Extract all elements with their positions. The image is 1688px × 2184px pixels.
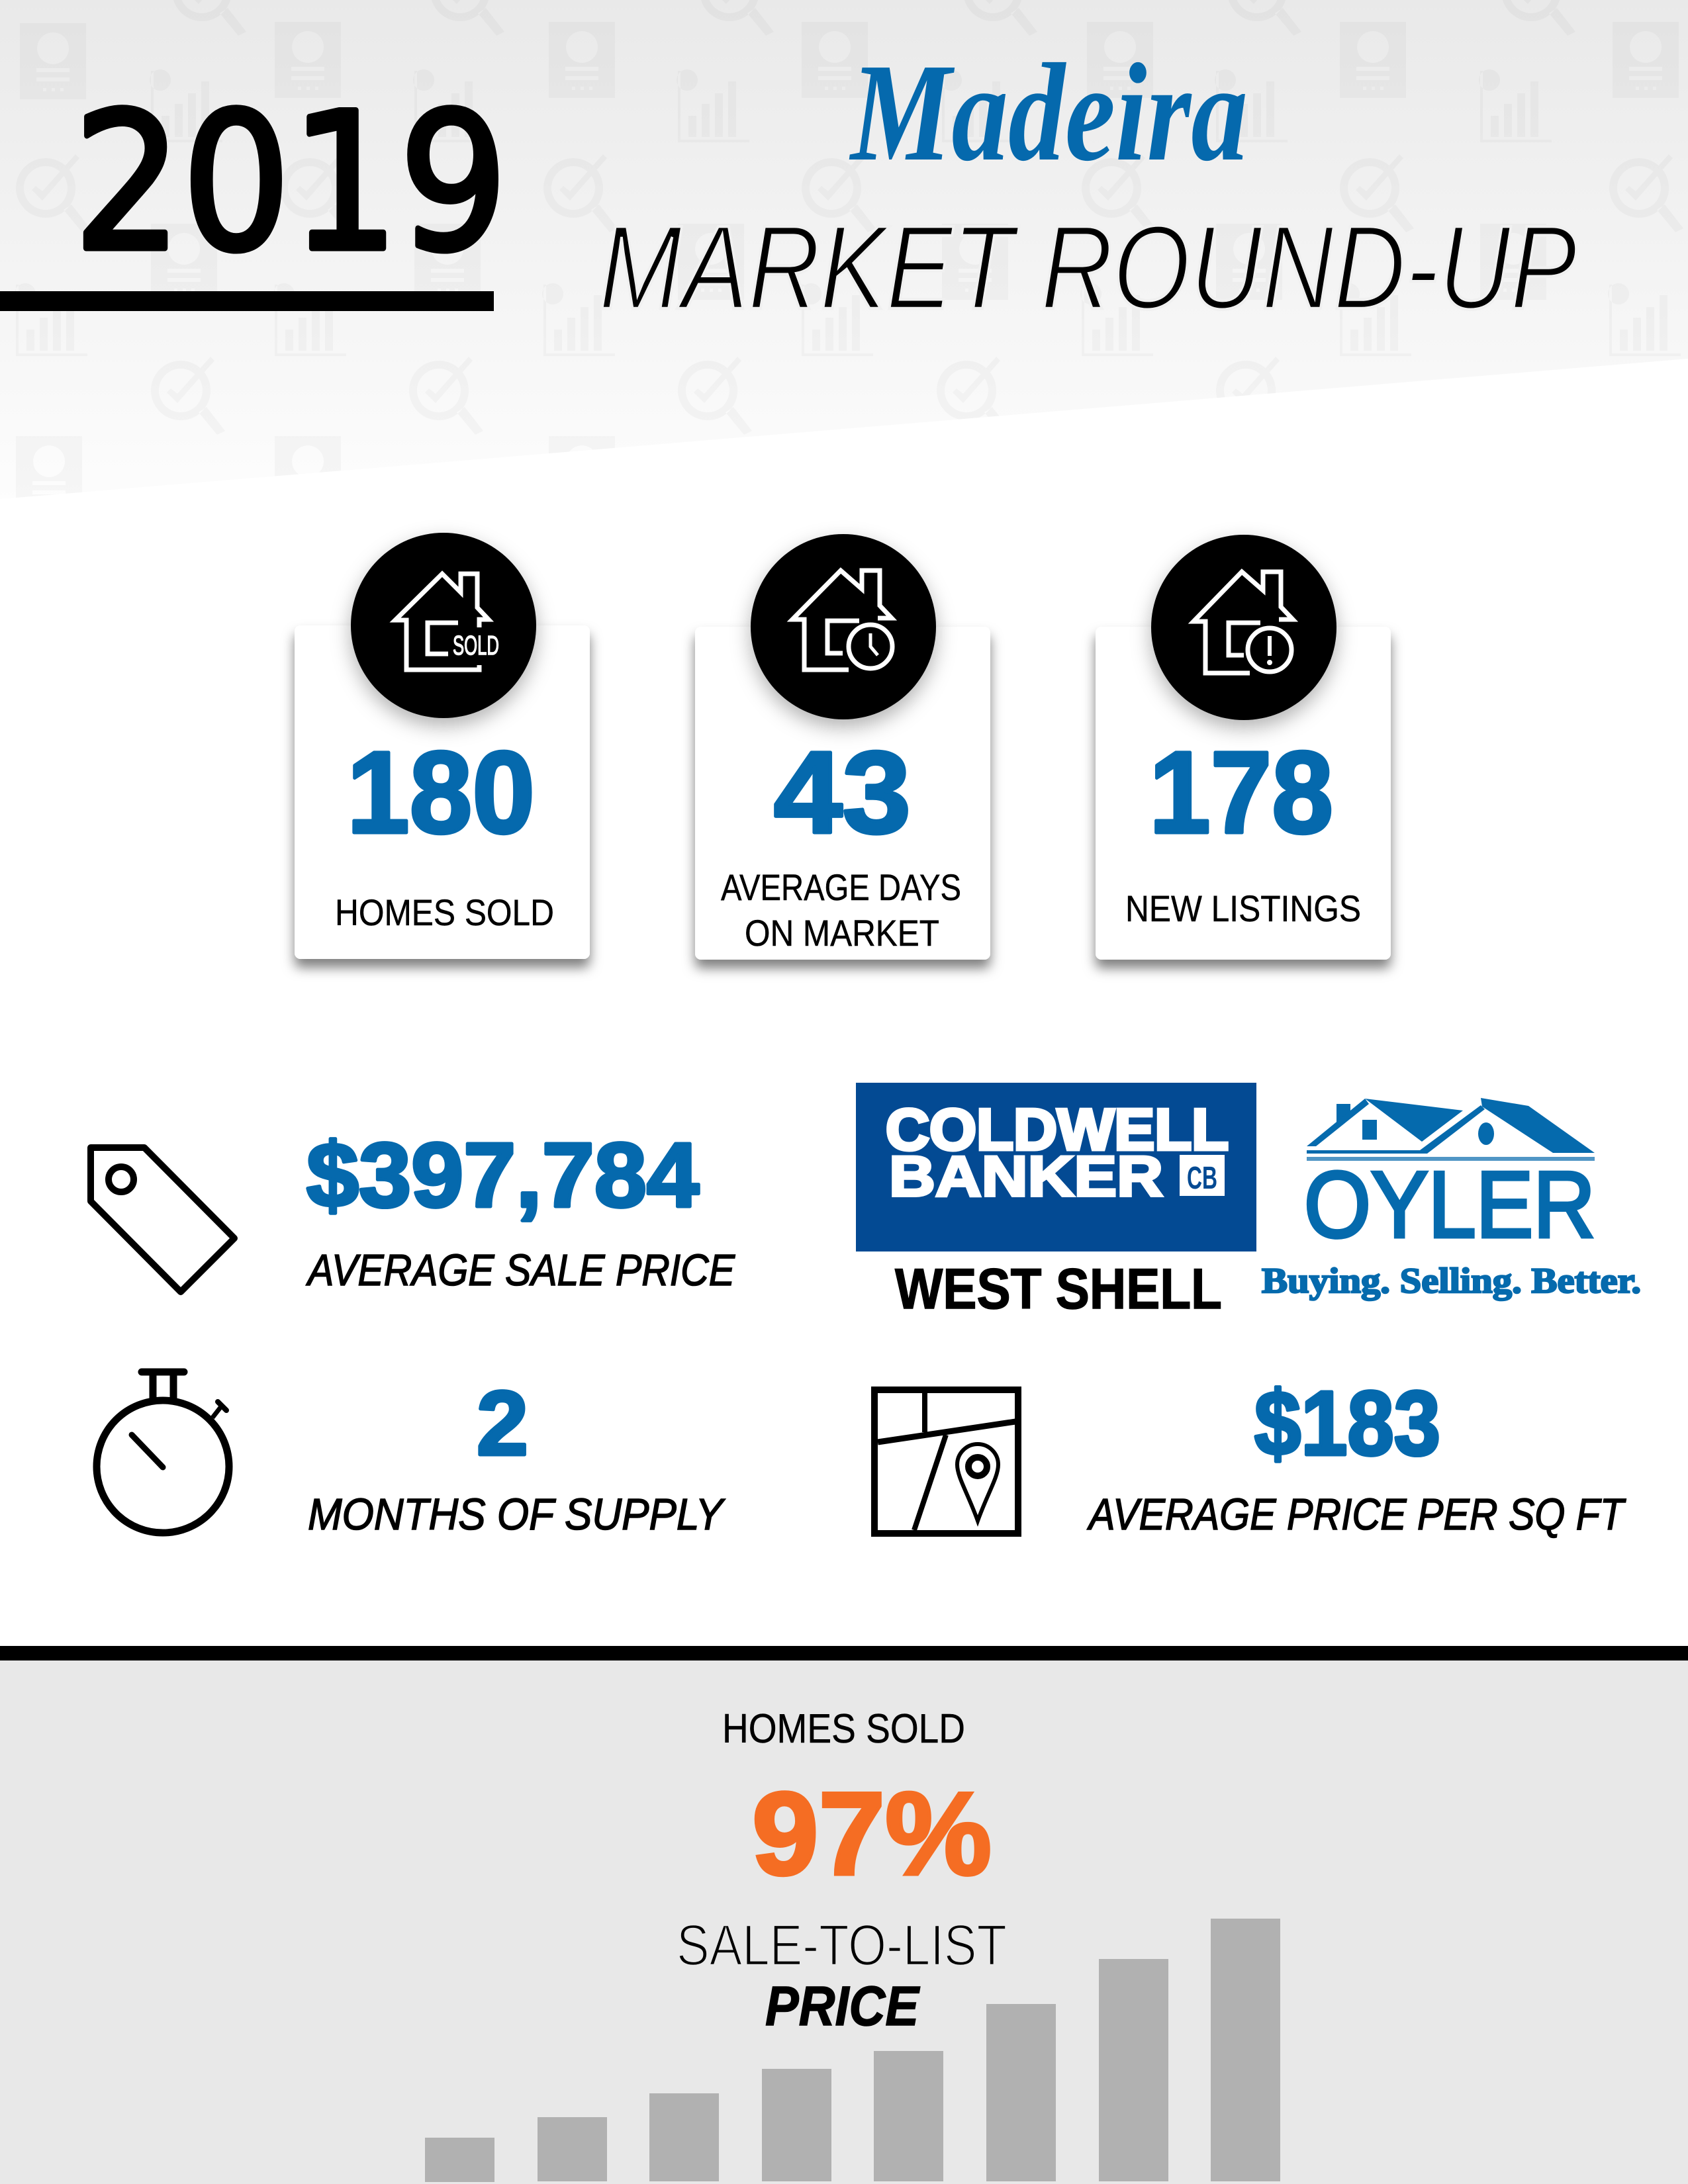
header background panel [0,0,1688,512]
stat number: average price per sq ft: $183 [1254,1373,1440,1475]
stat label: average days on market: ON MARKET [745,912,939,954]
stat label: average days on market: AVERAGE DAYS [721,866,961,908]
year heading: 2019 [73,73,508,293]
icon: house with clock [751,534,936,719]
icon: house with alert [1151,535,1336,720]
logo: Oyler: OYLER [1304,1152,1595,1257]
stat number: 180: 180 [347,728,535,858]
label: sale-to-list: SALE-TO-LIST [677,1913,1007,1978]
year underline [0,291,494,311]
stat label: average price per sq ft: AVERAGE PRICE PER SQ FT [1086,1490,1626,1539]
icon: stopwatch [97,1372,229,1533]
logo: Coldwell Banker West Shell [856,1083,1256,1321]
panel: sale-to-list section [0,1661,1688,2184]
heading: homes sold: HOMES SOLD [722,1706,965,1752]
icon: sold house: SOLD [453,630,499,660]
logo: Coldwell Banker West Shell: COLDWELL [886,1097,1229,1162]
stat number: 97%: 97% [752,1768,992,1899]
panel: homes sold card [295,533,590,959]
stat label: new listings: NEW LISTINGS [1125,887,1361,929]
logo: Coldwell Banker West Shell: WEST SHELL [895,1257,1222,1321]
logo: Coldwell Banker West Shell: CB [1187,1161,1217,1196]
label: price: PRICE [765,1975,921,2037]
stat number: 43: 43 [774,728,911,858]
panel: days on market card [695,534,990,960]
stat label: average days on market [721,866,961,954]
stat number: 178: 178 [1149,728,1333,858]
logo: Oyler: Buying. Selling. Better. [1262,1261,1641,1300]
icon: price tag [91,1148,234,1292]
logo: Coldwell Banker West Shell: BANKER [889,1145,1163,1208]
bar chart [425,1919,1280,2182]
icon: sold house [351,533,536,718]
panel: new listings card [1096,535,1391,960]
logo: Oyler [1262,1098,1641,1300]
stat label: homes sold: HOMES SOLD [335,891,554,933]
stat number: months of supply: 2 [477,1373,528,1475]
stat number: average sale price: $397,784 [306,1124,699,1226]
icon: map with pin [874,1390,1018,1533]
stat label: months of supply: MONTHS OF SUPPLY [308,1490,726,1539]
stat label: average sale price: AVERAGE SALE PRICE [305,1246,735,1295]
title: Madeira: Madeira [849,34,1248,190]
section divider bar [0,1646,1688,1661]
